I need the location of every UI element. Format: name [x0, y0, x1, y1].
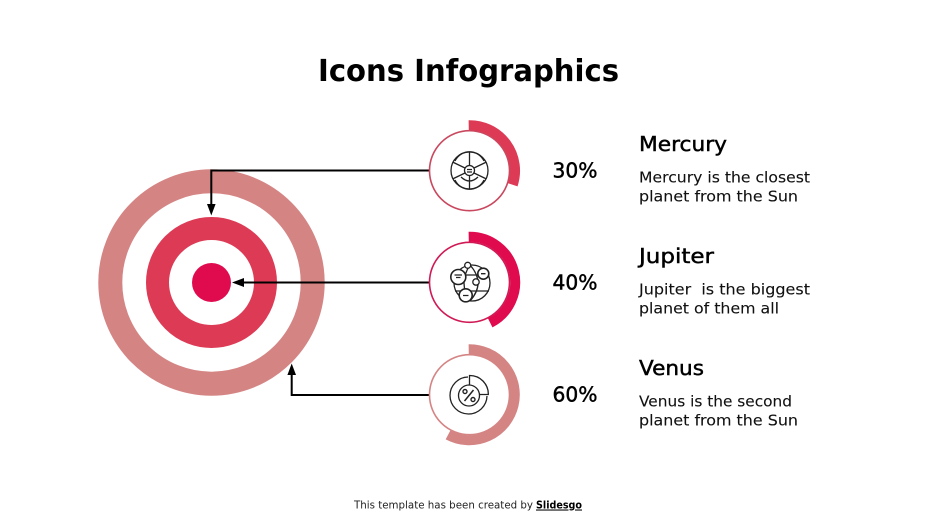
percentage: 30%: 30%	[552, 158, 598, 182]
arrow: Mercury to middle ring	[207, 170, 429, 216]
percentage: 60%: 60%	[552, 382, 598, 406]
text block: Mercury: Mercury is the closest	[639, 168, 810, 186]
arrow: Jupiter to centre	[232, 278, 429, 287]
text block: Venus	[639, 356, 798, 430]
text block: Venus: planet from the Sun	[639, 412, 798, 430]
text block: Venus: Venus is the second	[639, 392, 792, 410]
title: Icons Infographics	[318, 54, 619, 89]
text block: Jupiter: Jupiter is the biggest	[638, 280, 810, 298]
text block: Mercury: Mercury	[639, 132, 727, 156]
icon: globe with nodes	[451, 262, 490, 302]
text block: Jupiter	[637, 244, 810, 318]
panel: Mercury gauge	[430, 125, 515, 211]
footer credit: Slidesgo	[536, 500, 582, 512]
icon: percent donut	[450, 375, 488, 414]
target chart	[110, 181, 313, 384]
text block: Mercury	[639, 132, 810, 206]
text block: Jupiter: Jupiter	[637, 244, 715, 268]
text block: Jupiter: planet of them all	[639, 300, 779, 318]
icon: wheel	[451, 152, 488, 189]
panel: Jupiter gauge	[430, 237, 515, 323]
footer credit: This template has been created by	[353, 500, 533, 512]
text block: Mercury: planet from the Sun	[639, 188, 798, 206]
panel: Venus gauge	[430, 349, 515, 440]
percentage: 40%: 40%	[552, 270, 598, 294]
arrow: Venus to outer ring	[287, 364, 429, 395]
text block: Venus: Venus	[639, 356, 704, 380]
